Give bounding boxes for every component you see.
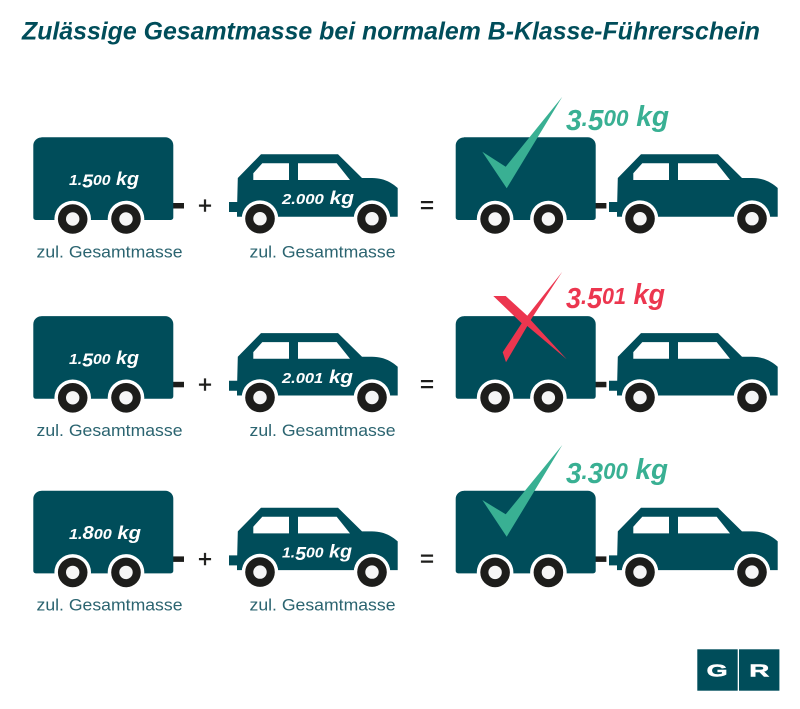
trailer 1.800 kg	[33, 491, 184, 591]
logo GR: G	[707, 661, 728, 681]
car 2.001 kg: 2.001 kg	[281, 367, 353, 387]
total 3.501 kg: 5	[587, 283, 603, 315]
equals sign: =	[420, 545, 434, 572]
plus sign: +	[198, 371, 212, 398]
equals sign: =	[420, 192, 434, 219]
trailer 1.500 kg	[33, 137, 184, 237]
row 1: valid combination	[33, 97, 778, 262]
car 1.500 kg: 1.	[282, 545, 295, 561]
total 3.300 kg: 3	[566, 458, 581, 490]
plus sign: +	[198, 546, 212, 573]
car 2.001 kg	[229, 333, 398, 416]
trailer 1.500 kg: kg	[116, 169, 137, 189]
car 1.500 kg: 5	[295, 544, 307, 564]
logo GR: R	[749, 661, 770, 681]
car label: zul. Gesamtmasse	[250, 421, 396, 440]
trailer 1.500 kg: 5	[82, 350, 94, 370]
trailer label: zul. Gesamtmasse	[36, 421, 182, 440]
trailer weight: 1.800 kg	[69, 523, 141, 543]
car 1.500 kg: 00	[306, 545, 324, 561]
total 3.300 kg: 00	[603, 458, 628, 484]
combined trailer and car	[456, 137, 778, 237]
total 3.501 kg: 01	[602, 283, 626, 309]
total 3.500 kg: .	[582, 105, 588, 131]
plus sign: +	[198, 192, 212, 220]
equals sign: =	[420, 371, 434, 398]
title: Zulässige Gesamtmasse bei normalem B-Klasse-Führerschein	[21, 18, 760, 46]
trailer 1.500 kg: 00	[93, 352, 111, 368]
trailer 1.500 kg	[33, 316, 184, 416]
combined trailer and car	[456, 316, 778, 416]
icon: green check mark	[482, 445, 562, 537]
trailer label: zul. Gesamtmasse	[36, 596, 182, 614]
logo GR	[697, 649, 779, 691]
total 3.500 kg: 5	[588, 105, 604, 137]
car label: zul. Gesamtmasse	[250, 596, 396, 614]
car 2.000 kg: 2.000 kg	[281, 188, 354, 208]
total 3.300 kg: 3	[588, 458, 603, 490]
row 2: invalid combination	[33, 272, 778, 440]
row 3: valid combination	[33, 445, 778, 614]
trailer 1.500 kg: kg	[116, 348, 137, 368]
car label: zul. Gesamtmasse	[250, 242, 396, 262]
total 3.501 kg: 3	[566, 283, 581, 315]
total 3.501 kg: .	[581, 283, 587, 309]
car 2.000 kg	[229, 154, 398, 237]
total 3.501 kg: kg	[634, 279, 668, 311]
total 3.500 kg: 3	[566, 105, 582, 137]
icon: green check mark	[482, 97, 562, 188]
total 3.500 kg: 00	[603, 105, 629, 131]
car 1.500 kg: kg	[329, 541, 350, 561]
combined trailer and car	[456, 491, 778, 591]
car 1.500 kg	[229, 508, 398, 590]
trailer 1.500 kg: 00	[93, 173, 111, 189]
total 3.300 kg: kg	[636, 454, 670, 486]
trailer 1.500 kg: 1.	[69, 173, 82, 189]
total 3.300 kg: .	[581, 458, 588, 484]
trailer label: zul. Gesamtmasse	[36, 242, 182, 262]
trailer 1.500 kg: 1.	[69, 352, 82, 368]
trailer 1.500 kg: 5	[82, 172, 94, 192]
total 3.500 kg: kg	[636, 101, 670, 133]
icon: red cross	[493, 272, 567, 362]
